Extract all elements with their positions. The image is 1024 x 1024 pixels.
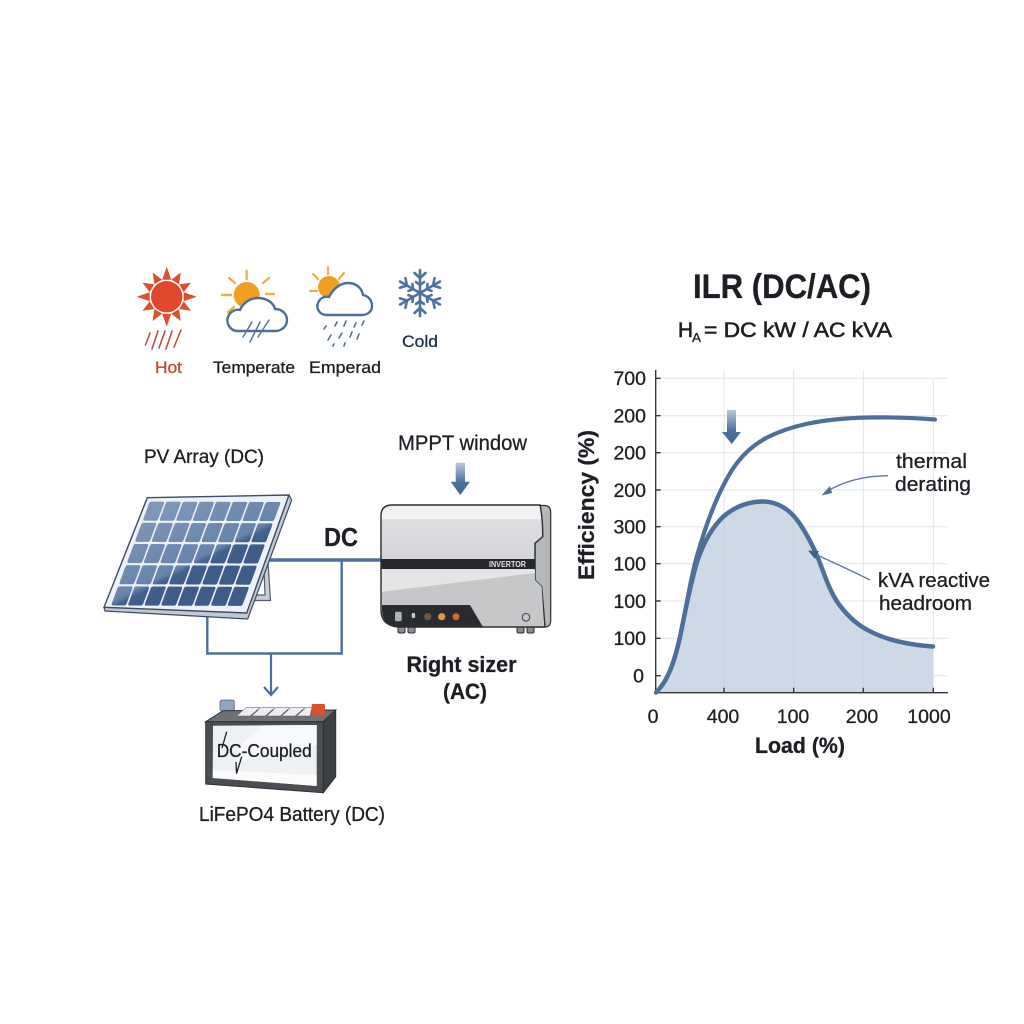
arrow: MPPT window pointing to inverter bbox=[451, 463, 470, 495]
y axis tick labels: 200 bbox=[613, 406, 646, 428]
inverter side profile bbox=[530, 506, 551, 627]
x axis tick labels: 200 bbox=[846, 706, 878, 728]
icon: solar panel bbox=[104, 495, 292, 619]
y axis tick labels: 300 bbox=[613, 516, 646, 538]
battery front bbox=[206, 722, 323, 793]
label: PV Array (DC): PV Array (DC) bbox=[144, 447, 264, 468]
x axis tick labels: 100 bbox=[777, 706, 809, 728]
axes bbox=[656, 370, 948, 693]
y axis tick labels: 100 bbox=[613, 554, 646, 576]
panel frame bbox=[104, 495, 292, 619]
title: ILR (DC/AC) bbox=[693, 268, 871, 306]
label: Right sizer (AC): (AC) bbox=[443, 679, 487, 704]
climate icons row bbox=[137, 267, 443, 377]
x axis title: Load (%) bbox=[755, 733, 845, 758]
y axis tick labels: 100 bbox=[613, 628, 646, 650]
y axis title: Efficiency (%) bbox=[574, 430, 599, 580]
icon: sun with cloud and rain drops bbox=[310, 267, 372, 346]
icon: hot sun with heat lines bbox=[137, 267, 197, 349]
x axis tick labels: 1000 bbox=[907, 706, 951, 728]
dark band with model text: INVERTOR bbox=[489, 560, 526, 569]
x axis tick labels bbox=[648, 706, 951, 728]
label: Right sizer (AC): Right sizer bbox=[406, 652, 517, 677]
y axis tick labels bbox=[613, 368, 646, 688]
x axis tick labels: 0 bbox=[648, 706, 659, 728]
callout: kVA reactive headroom bbox=[808, 550, 990, 615]
callout: thermal derating: thermal bbox=[896, 451, 967, 473]
subtitle: formula: H bbox=[678, 319, 693, 342]
callout: thermal derating bbox=[822, 451, 971, 496]
subtitle: formula: = DC kW / AC kVA bbox=[704, 318, 893, 342]
label: Right sizer (AC) bbox=[406, 652, 517, 704]
callout: kVA reactive headroom: headroom bbox=[879, 593, 972, 615]
repeated grid through shaded area bbox=[724, 515, 863, 692]
label: LiFePO4 Battery (DC): LiFePO4 Battery (DC) bbox=[199, 804, 385, 826]
arrow: marker on upper curve bbox=[722, 410, 741, 444]
status ring bbox=[522, 614, 530, 621]
lower body shade bbox=[382, 573, 544, 626]
curve: lower thermal bbox=[656, 502, 933, 692]
label: Hot: Hot bbox=[155, 358, 182, 377]
dark band with model text bbox=[382, 559, 535, 569]
y axis tick labels: 200 bbox=[613, 442, 646, 464]
y axis tick labels: 700 bbox=[613, 368, 646, 390]
icon: snowflake bbox=[397, 270, 443, 316]
wiring: DC connections bbox=[207, 560, 382, 695]
photovoltaic cells bbox=[111, 502, 281, 606]
shaded area under lower curve bbox=[656, 502, 933, 692]
y axis tick labels: 200 bbox=[613, 480, 646, 502]
x axis tick labels: 400 bbox=[707, 706, 739, 728]
curve: upper efficiency bbox=[656, 417, 935, 692]
label: DC: DC bbox=[324, 522, 358, 552]
line chart: efficiency vs load bbox=[574, 368, 990, 758]
label: Emperad: Emperad bbox=[309, 358, 381, 377]
y axis tick labels: 100 bbox=[613, 591, 646, 613]
top vents bbox=[237, 708, 312, 716]
callout: kVA reactive headroom: kVA reactive bbox=[878, 570, 990, 592]
subtitle: formula: A bbox=[692, 330, 701, 345]
icon: temperate sun with cloud and rain bbox=[222, 271, 287, 342]
inverter body bbox=[381, 505, 545, 627]
icon: battery bbox=[206, 700, 336, 793]
y axis tick labels: 0 bbox=[633, 666, 644, 688]
panel stand bbox=[254, 562, 270, 600]
lightning bolt bbox=[222, 732, 242, 774]
battery label: DC-Coupled bbox=[217, 740, 312, 761]
label: MPPT window: MPPT window bbox=[398, 432, 528, 455]
label: Temperate: Temperate bbox=[213, 358, 295, 377]
icon: inverter bbox=[381, 505, 551, 633]
control panel bbox=[382, 605, 483, 627]
battery terminals bbox=[220, 700, 234, 711]
inverter feet bbox=[398, 626, 534, 633]
callout: thermal derating: derating bbox=[895, 474, 971, 496]
battery top and side bbox=[206, 710, 336, 722]
label: Cold: Cold bbox=[402, 332, 438, 351]
grid lines bbox=[656, 370, 948, 693]
